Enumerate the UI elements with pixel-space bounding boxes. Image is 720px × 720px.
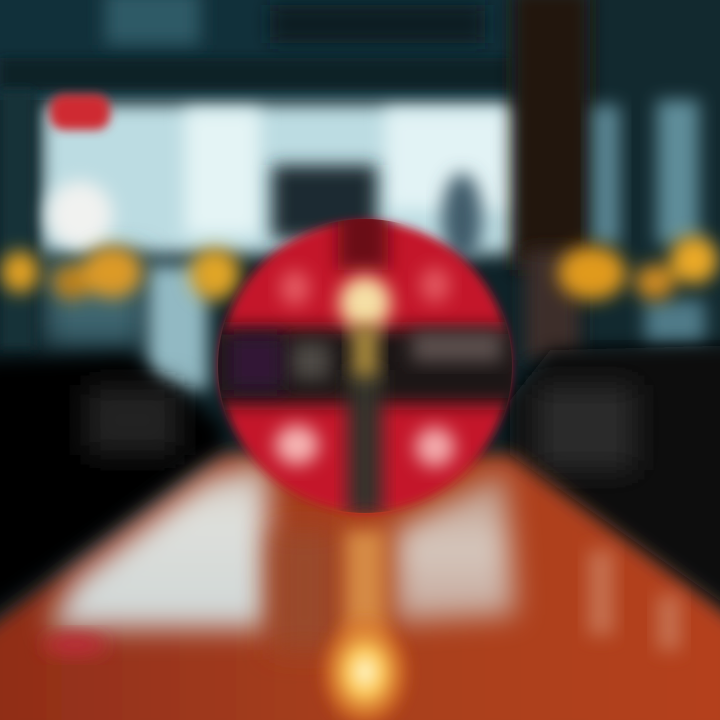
sphere lamp <box>339 276 391 330</box>
sphere highlights <box>280 270 310 306</box>
white blob <box>47 181 113 249</box>
reflective table <box>0 455 720 720</box>
amber lights right <box>558 236 718 300</box>
ceiling <box>0 0 720 100</box>
red sphere <box>205 205 525 515</box>
sphere dark top <box>338 205 388 270</box>
seat detail <box>85 385 635 470</box>
window backdrop <box>0 90 520 390</box>
sphere lamp stem <box>352 325 378 377</box>
dark figures behind sphere <box>272 165 482 263</box>
red sign <box>50 94 110 130</box>
amber lights left <box>1 246 240 300</box>
right column and teal wall <box>512 0 720 360</box>
dark seating left <box>0 355 222 620</box>
table glow <box>315 610 415 720</box>
sphere dark band <box>205 328 525 404</box>
sphere centre stem <box>348 370 382 515</box>
dark seating right <box>510 345 720 615</box>
